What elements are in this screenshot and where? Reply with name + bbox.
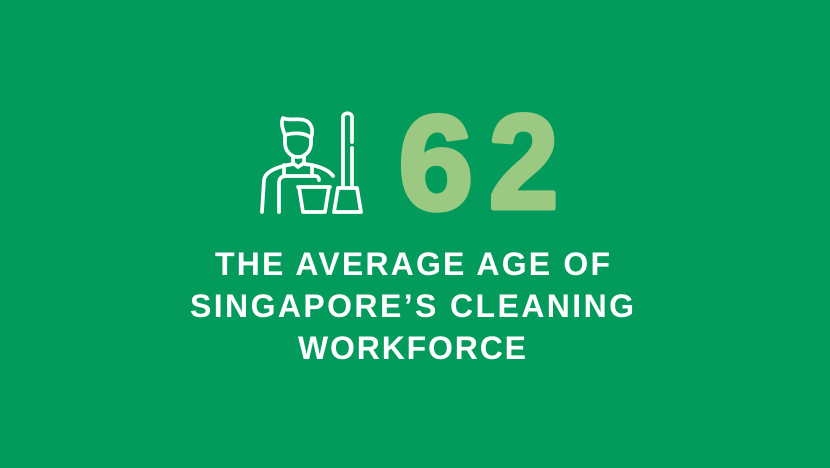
icon: cleaner with bucket and broom <box>262 113 361 212</box>
digit 2: 2 <box>489 88 558 237</box>
icon: cleaner's apron and forearm <box>279 165 319 212</box>
icon: cleaner's shoulders and arms <box>262 164 333 212</box>
icon: broom handle <box>343 113 352 186</box>
heading line 3: WORKFORCE <box>298 330 526 366</box>
number: 62 <box>398 88 558 238</box>
digit 6: 6 <box>398 89 473 238</box>
heading: average age of cleaning workforce <box>190 246 634 366</box>
heading line 2: SINGAPORE’S CLEANING <box>190 288 634 324</box>
icon: broom head <box>334 188 361 212</box>
icon: cleaner's face <box>285 135 311 157</box>
heading line 1: THE AVERAGE AGE OF <box>215 246 610 282</box>
icon: cleaner's hair <box>282 118 312 138</box>
icon: bucket <box>298 187 330 212</box>
icon: cleaner's neck and collar <box>293 157 304 167</box>
